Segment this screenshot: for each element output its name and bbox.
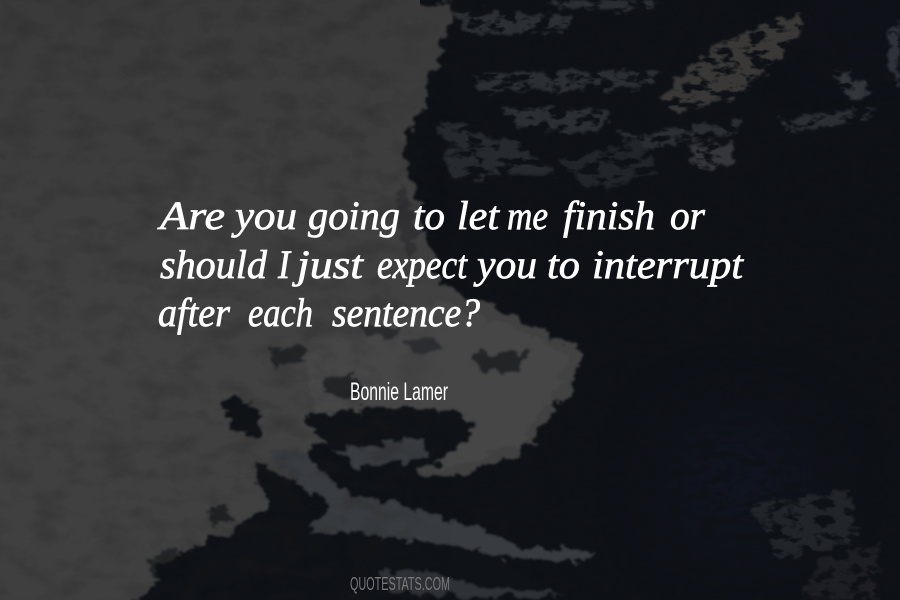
quote line 3 <box>158 290 480 335</box>
watermark: QUOTESTATS.COM <box>350 574 450 594</box>
quote text <box>157 193 744 335</box>
foam strip in lower water <box>268 440 595 598</box>
quote line 1: going <box>308 193 400 238</box>
quote line 3: after <box>158 290 230 335</box>
quote line 3: each <box>248 290 313 335</box>
dark holes in the foam <box>150 180 570 600</box>
lower right foam speckle <box>750 490 880 600</box>
quote line 2: I <box>277 242 292 287</box>
main foam mass on the left and centre <box>0 0 585 600</box>
break-up of the water foam <box>441 0 900 600</box>
quote line 2: you <box>473 242 537 287</box>
foam texture <box>8 7 392 533</box>
foam streaks on the water, top right <box>440 0 900 190</box>
blue tint on right water <box>680 0 900 530</box>
foam edge underlay <box>0 0 420 600</box>
lighter foam patch behind author <box>300 300 570 470</box>
quote line 1: finish <box>563 193 655 238</box>
quote line 2: should <box>160 242 268 287</box>
quote line 1: me <box>507 193 548 238</box>
quote line 1: let <box>457 193 500 238</box>
quote line 2: just <box>291 242 364 287</box>
quote line 3: sentence? <box>332 290 480 335</box>
quote line 2: expect <box>377 242 468 287</box>
quote line 2: interrupt <box>592 242 744 287</box>
quote line 2 <box>160 242 744 287</box>
author name: Bonnie Lamer <box>350 378 448 406</box>
quote line 1 <box>157 193 705 238</box>
quote line 2: to <box>547 242 580 287</box>
quote line 1: Are <box>157 193 225 238</box>
quote line 1: to <box>413 193 445 238</box>
quote line 1: or <box>670 193 705 238</box>
quote line 1: you <box>231 193 297 238</box>
